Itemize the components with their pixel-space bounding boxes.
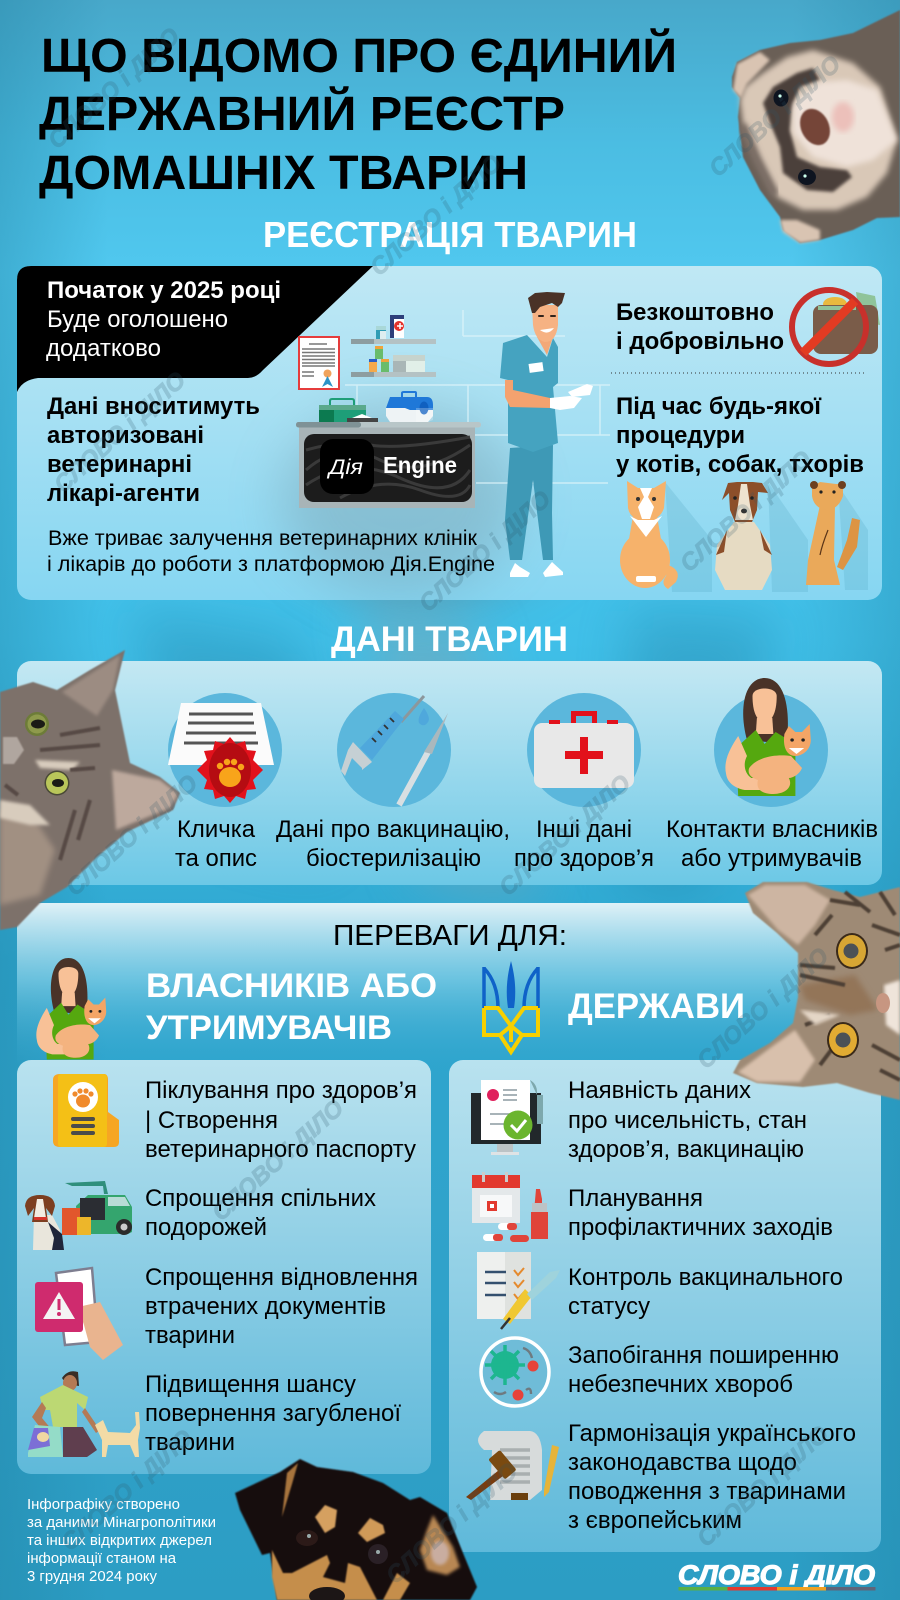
watermarks: СЛОВО і ДІЛО [675, 445, 817, 577]
item: owner contacts: Контакти власників [666, 816, 878, 843]
text: authorised vets: ветеринарні [47, 451, 192, 478]
item: name and description: Кличка [177, 816, 256, 843]
text [145, 1185, 376, 1241]
text [145, 1371, 401, 1456]
panel: animal data [17, 661, 882, 885]
text: статусу [568, 1293, 650, 1320]
text [568, 1420, 856, 1534]
heading: title: ДЕРЖАВНИЙ РЕЄСТР [39, 86, 565, 141]
icon: dog [715, 482, 808, 592]
logo: СЛОВО і ДІЛО [678, 1560, 875, 1590]
text: free and voluntary [616, 299, 784, 355]
heading: title: ДОМАШНІХ ТВАРИН [39, 147, 528, 200]
panel: benefits for owners [17, 1060, 431, 1474]
text: clinics involved: і лікарів до роботи з платформою Дія.Engine [47, 553, 495, 576]
text: source credits [27, 1497, 216, 1585]
icon: green case [319, 399, 366, 422]
watermarks: СЛОВО і ДІЛО [61, 769, 203, 901]
heading: owners: УТРИМУВАЧІВ [146, 1009, 392, 1047]
icon: bacteria [481, 1338, 549, 1406]
icon: cat [620, 481, 712, 592]
icon: owner with cat [36, 958, 106, 1059]
text: подорожей [145, 1214, 267, 1241]
icon: trident [484, 961, 538, 1052]
text: authorised vets: авторизовані [47, 422, 204, 449]
text: тварини [145, 1322, 235, 1349]
icon: law scroll and gavel [466, 1431, 559, 1500]
text: з європейським [568, 1507, 742, 1534]
text: Підвищення шансу [145, 1371, 356, 1398]
text: Наявність даних [568, 1077, 751, 1104]
watermarks: СЛОВО і ДІЛО [381, 1457, 523, 1589]
watermarks: СЛОВО і ДІЛО [56, 1424, 198, 1556]
text: небезпечних хвороб [568, 1371, 793, 1398]
icon: crossed wallet [792, 290, 880, 364]
watermarks: СЛОВО і ДІЛО [414, 485, 556, 617]
text: any procedure: у котів, собак, тхорів [616, 451, 864, 478]
black banner: Початок у 2025 році [47, 277, 281, 304]
black banner: додатково [46, 335, 161, 362]
text [568, 1342, 839, 1398]
text: source credits: та інших відкритих джерел [27, 1533, 212, 1549]
photo: tabby cat right [733, 882, 900, 1100]
text: профілактичних заходів [568, 1214, 833, 1241]
text: free and voluntary: і добровільно [616, 328, 784, 355]
text [568, 1077, 807, 1163]
Diia Engine screen: Дія [327, 456, 363, 479]
text: Гармонізація українського [568, 1420, 856, 1447]
heading: owners: ВЛАСНИКІВ АБО [146, 967, 437, 1005]
heading: owners [146, 967, 437, 1047]
panel: benefits header [17, 903, 882, 1073]
item: other health data: Інші дані [536, 816, 632, 843]
text: Планування [568, 1185, 703, 1212]
veterinarian [500, 292, 593, 577]
icon: blue carrier [386, 392, 433, 422]
text: any procedure [611, 373, 867, 478]
item: name and description: та опис [175, 845, 257, 872]
icon: checklist and syringe [477, 1252, 560, 1329]
Diia Engine screen: Engine [383, 452, 457, 478]
text [568, 1264, 843, 1320]
item: name and description [168, 693, 282, 872]
text: повернення загубленої [145, 1400, 401, 1427]
photo: puppy [235, 1459, 477, 1600]
text: Контроль вакцинального [568, 1264, 843, 1291]
text: Піклування про здоров’я [145, 1077, 417, 1104]
watermarks: СЛОВО і ДІЛО [43, 22, 185, 154]
watermarks: СЛОВО і ДІЛО [692, 942, 834, 1074]
text: | Створення [145, 1107, 278, 1134]
text: Запобігання поширенню [568, 1342, 839, 1369]
icon: pet passport [53, 1074, 119, 1147]
watermarks: СЛОВО і ДІЛО [49, 366, 191, 498]
item: owner contacts [666, 678, 878, 872]
text: source credits: Інфографіку створено [27, 1497, 180, 1513]
item: vaccination [276, 693, 510, 872]
watermarks: СЛОВО і ДІЛО [704, 50, 846, 182]
text: source credits: інформації станом на [27, 1551, 177, 1567]
photo: grey cat left [0, 650, 180, 930]
heading: state: ДЕРЖАВИ [568, 987, 745, 1026]
icon: phone alert [35, 1268, 123, 1360]
photo: ferret [732, 10, 900, 243]
icon: calendar and medicine [472, 1172, 548, 1242]
heading: title: ЩО ВІДОМО ПРО ЄДИНИЙ [41, 28, 677, 83]
text [145, 1264, 418, 1349]
item: vaccination: біостерилізацію [306, 845, 481, 872]
icon: monitor with record [471, 1080, 543, 1155]
text: поводження з тваринами [568, 1478, 846, 1505]
text: authorised vets [47, 393, 260, 507]
item: owner contacts: або утримувачів [681, 845, 862, 872]
text: clinics involved: Вже триває залучення ветеринарних клінік [48, 527, 478, 550]
icon: dog and car [25, 1181, 132, 1250]
text: free and voluntary: Безкоштовно [616, 299, 774, 326]
text: ветеринарного паспорту [145, 1136, 416, 1163]
desk [296, 414, 481, 508]
text: здоров’я, вакцинацію [568, 1136, 804, 1163]
text: any procedure: Під час будь-якої [616, 393, 822, 420]
Diia Engine screen [304, 434, 472, 502]
watermarks: СЛОВО і ДІЛО [692, 1420, 834, 1552]
text [145, 1077, 417, 1163]
heading: registration: РЕЄСТРАЦІЯ ТВАРИН [263, 214, 637, 255]
heading: animal data: ДАНІ ТВАРИН [331, 620, 568, 659]
text: законодавства щодо [568, 1449, 797, 1476]
watermarks: СЛОВО і ДІЛО [494, 769, 636, 901]
text [568, 1185, 833, 1241]
text: clinics involved [47, 527, 495, 576]
icon: ferret [806, 481, 868, 590]
heading: title [39, 28, 677, 200]
icon: person with pets [28, 1371, 140, 1457]
item: other health data: про здоров’я [514, 845, 654, 872]
text: Спрощення спільних [145, 1185, 376, 1212]
text: тварини [145, 1429, 235, 1456]
text: any procedure: процедури [616, 422, 745, 449]
text: Спрощення відновлення [145, 1264, 418, 1291]
icon: certificate [299, 337, 339, 389]
black banner: Буде оголошено [47, 306, 228, 333]
text: source credits: 3 грудня 2024 року [27, 1569, 158, 1585]
black banner [17, 266, 373, 392]
text: про чисельність, стан [568, 1107, 807, 1134]
watermarks: СЛОВО і ДІЛО [207, 1094, 349, 1226]
text: source credits: за даними Мінагрополітики [27, 1515, 216, 1531]
item: other health data [514, 693, 654, 872]
text: authorised vets: Дані вноситимуть [47, 393, 260, 420]
text: authorised vets: лікарі-агенти [47, 480, 200, 507]
panel: benefits for the state [449, 1060, 881, 1552]
watermarks: СЛОВО і ДІЛО [365, 149, 507, 281]
panel: registration [17, 266, 882, 600]
item: vaccination: Дані про вакцинацію, [276, 816, 510, 843]
shelves with medicine [351, 315, 436, 377]
heading: benefits for: ПЕРЕВАГИ ДЛЯ: [333, 920, 567, 952]
text: втрачених документів [145, 1293, 386, 1320]
